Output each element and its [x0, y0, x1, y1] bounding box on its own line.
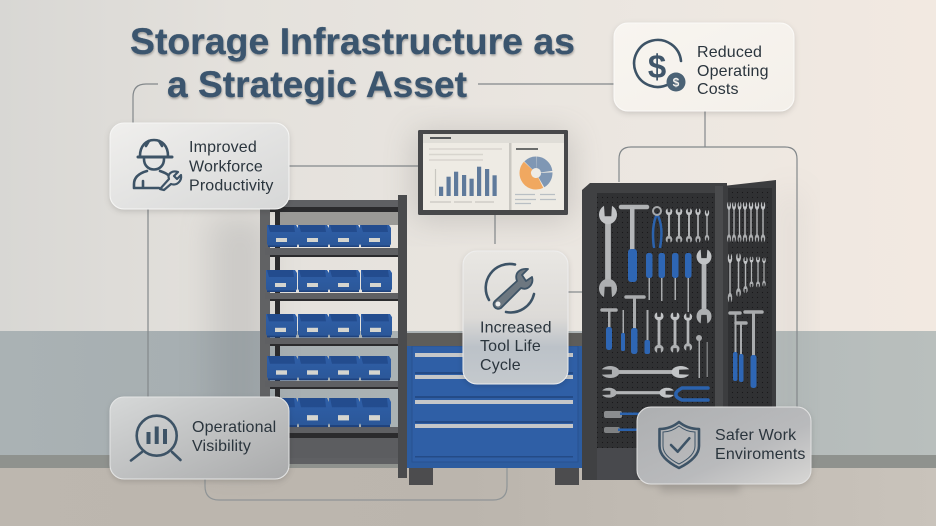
- icon: wrench in circle: [486, 264, 534, 312]
- card: improved workforce productivity: Improved: [189, 139, 257, 156]
- connector lines: [133, 84, 797, 500]
- blue bins: [266, 225, 392, 427]
- card: operational visibility: Operational: [192, 419, 276, 436]
- tool cabinet with pegboard: [582, 180, 776, 480]
- card: increased tool life cycle: Increased: [480, 320, 552, 336]
- icon: magnifier with bars: [131, 416, 180, 460]
- pie chart: [521, 158, 551, 188]
- card: operational visibility: [110, 397, 289, 479]
- title: a Strategic Asset: [167, 64, 467, 105]
- card: safer work environments: [637, 407, 811, 484]
- card: reduced operating costs: Reduced: [697, 44, 762, 61]
- card: increased tool life cycle: Cycle: [480, 357, 521, 374]
- floor shadow under tool cabinet: [660, 484, 740, 492]
- icon: dollar coin: [634, 40, 686, 92]
- card: improved workforce productivity: [110, 123, 289, 209]
- hammers and screwdrivers: [602, 207, 762, 433]
- card: reduced operating costs: Operating: [697, 63, 769, 80]
- card: operational visibility: Visibility: [192, 438, 251, 455]
- wrenches: [599, 201, 766, 398]
- card: improved workforce productivity: Productivity: [189, 178, 274, 194]
- card: increased tool life cycle: Tool Life: [480, 338, 541, 355]
- icon: shield with check: [660, 422, 699, 468]
- bar chart: [439, 167, 497, 196]
- card: reduced operating costs: Costs: [697, 81, 739, 98]
- card: reduced operating costs: [614, 23, 794, 111]
- title: Storage Infrastructure as: [130, 21, 575, 62]
- wall monitor dashboard: [414, 130, 572, 220]
- shelving unit with blue bins: [260, 195, 407, 478]
- icon: worker with wrench: [134, 140, 181, 190]
- blue drawer cabinet: [407, 333, 582, 485]
- card: improved workforce productivity: Workforce: [189, 158, 263, 176]
- title: [130, 21, 575, 105]
- icon: dollar coin: $: [648, 48, 666, 85]
- card: safer work environments: Enviroments: [715, 446, 806, 463]
- icon: dollar coin: $: [673, 76, 680, 90]
- card: increased tool life cycle: [463, 251, 568, 384]
- card: safer work environments: Safer Work: [715, 427, 797, 444]
